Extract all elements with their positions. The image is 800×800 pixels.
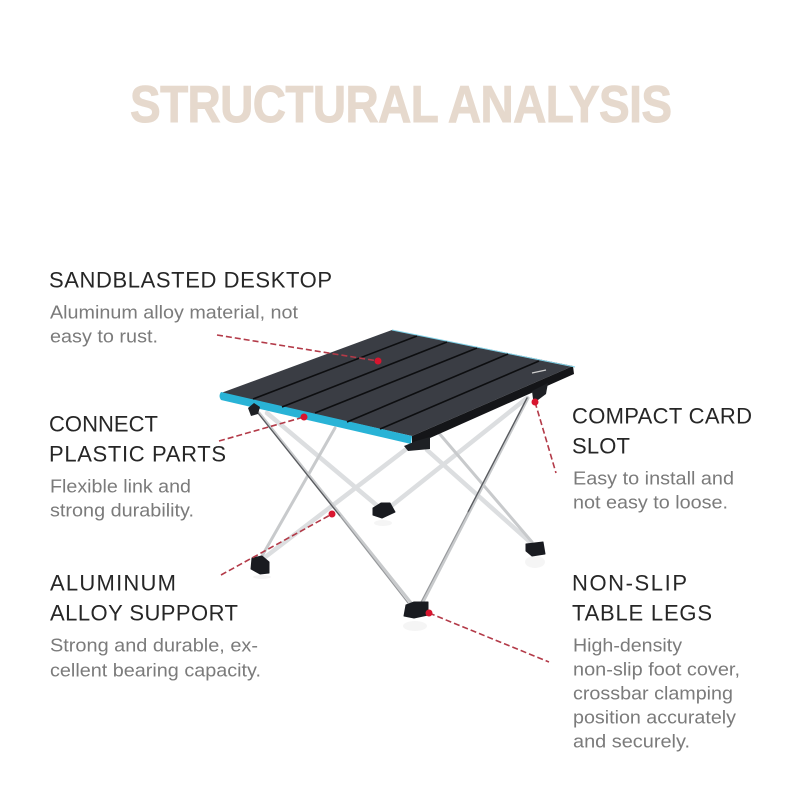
text block: non-slip table legs: and securely. [573,732,690,752]
text block: connect plastic parts [49,412,226,520]
text block: aluminum alloy support: ALUMINUM [50,570,176,596]
text block: connect plastic parts: CONNECT [49,412,158,436]
text block: non-slip table legs: non-slip foot cover, [573,660,740,680]
text block: non-slip table legs: NON-SLIP [572,570,687,596]
folding table illustration [220,330,575,631]
text block: aluminum alloy support: Strong and durable, ex- [50,636,258,656]
text block: compact card slot: COMPACT CARD [572,404,752,428]
callout: connect plastic parts line [219,414,308,441]
text block: non-slip table legs: position accurately [573,708,736,728]
text block: sandblasted desktop: Aluminum alloy material, not [50,302,298,322]
text block: non-slip table legs [572,570,740,752]
text block: compact card slot [572,404,752,512]
text block: sandblasted desktop: SANDBLASTED DESKTOP [49,268,332,292]
text block: aluminum alloy support: ALLOY SUPPORT [50,600,238,626]
text block: aluminum alloy support: cellent bearing capacity. [50,660,261,680]
text block: aluminum alloy support [50,570,261,680]
callout: non-slip table legs line [426,610,549,662]
text block: non-slip table legs: TABLE LEGS [572,600,712,626]
non-slip feet [251,503,545,618]
text block: connect plastic parts: strong durability. [50,500,194,520]
top joints [248,383,548,451]
callout: compact card slot line [532,398,556,473]
callout: sandblasted desktop line [217,335,382,364]
text block: non-slip table legs: High-density [573,636,682,656]
text block: compact card slot: SLOT [572,434,630,458]
text block: connect plastic parts: Flexible link and [50,476,191,496]
text block: connect plastic parts: PLASTIC PARTS [49,442,226,466]
aluminum legs [258,398,532,604]
blue plastic edge [220,392,412,444]
title: STRUCTURAL ANALYSIS [130,77,672,134]
brand mark [532,370,546,373]
callout: aluminum alloy support line [221,510,336,575]
floor shadows [253,520,545,631]
text block: sandblasted desktop: easy to rust. [50,326,158,346]
text block: sandblasted desktop [49,268,332,346]
blue back edge [392,330,575,367]
table top [221,330,573,436]
tabletop grooves [253,336,539,429]
text block: compact card slot: Easy to install and [573,468,734,488]
text block: non-slip table legs: crossbar clamping [573,684,733,704]
text block: compact card slot: not easy to loose. [573,492,728,512]
dark side edge [412,366,574,446]
